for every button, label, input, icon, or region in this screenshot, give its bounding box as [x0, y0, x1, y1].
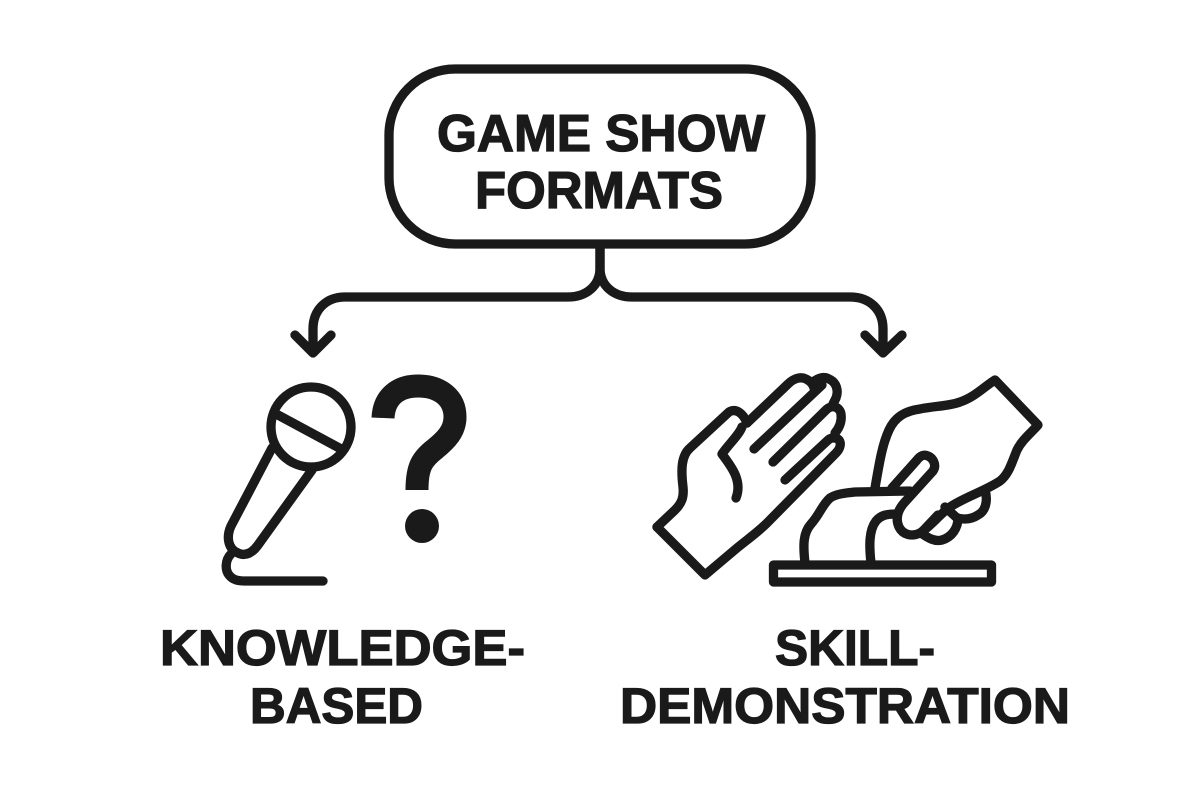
title box: FORMATS [475, 162, 723, 220]
arrow: to knowledge-based [295, 248, 600, 353]
label: knowledge-based [160, 620, 525, 734]
title box [389, 69, 811, 244]
arrow: to skill-demonstration [600, 248, 902, 353]
icon: hand pressing buzzer [804, 380, 1038, 563]
title text: GAME SHOW [437, 105, 766, 163]
label: skill-demonstration: SKILL- [775, 620, 935, 676]
icon: microphone [226, 387, 351, 581]
label: knowledge-based: KNOWLEDGE- [160, 620, 525, 676]
label: knowledge-based: BASED [250, 678, 423, 734]
icon: question mark [383, 386, 455, 543]
label: skill-demonstration [620, 620, 1070, 734]
icon: raised open hand [657, 378, 841, 575]
label: skill-demonstration: DEMONSTRATION [620, 678, 1070, 734]
icon: buzzer base [774, 565, 992, 582]
